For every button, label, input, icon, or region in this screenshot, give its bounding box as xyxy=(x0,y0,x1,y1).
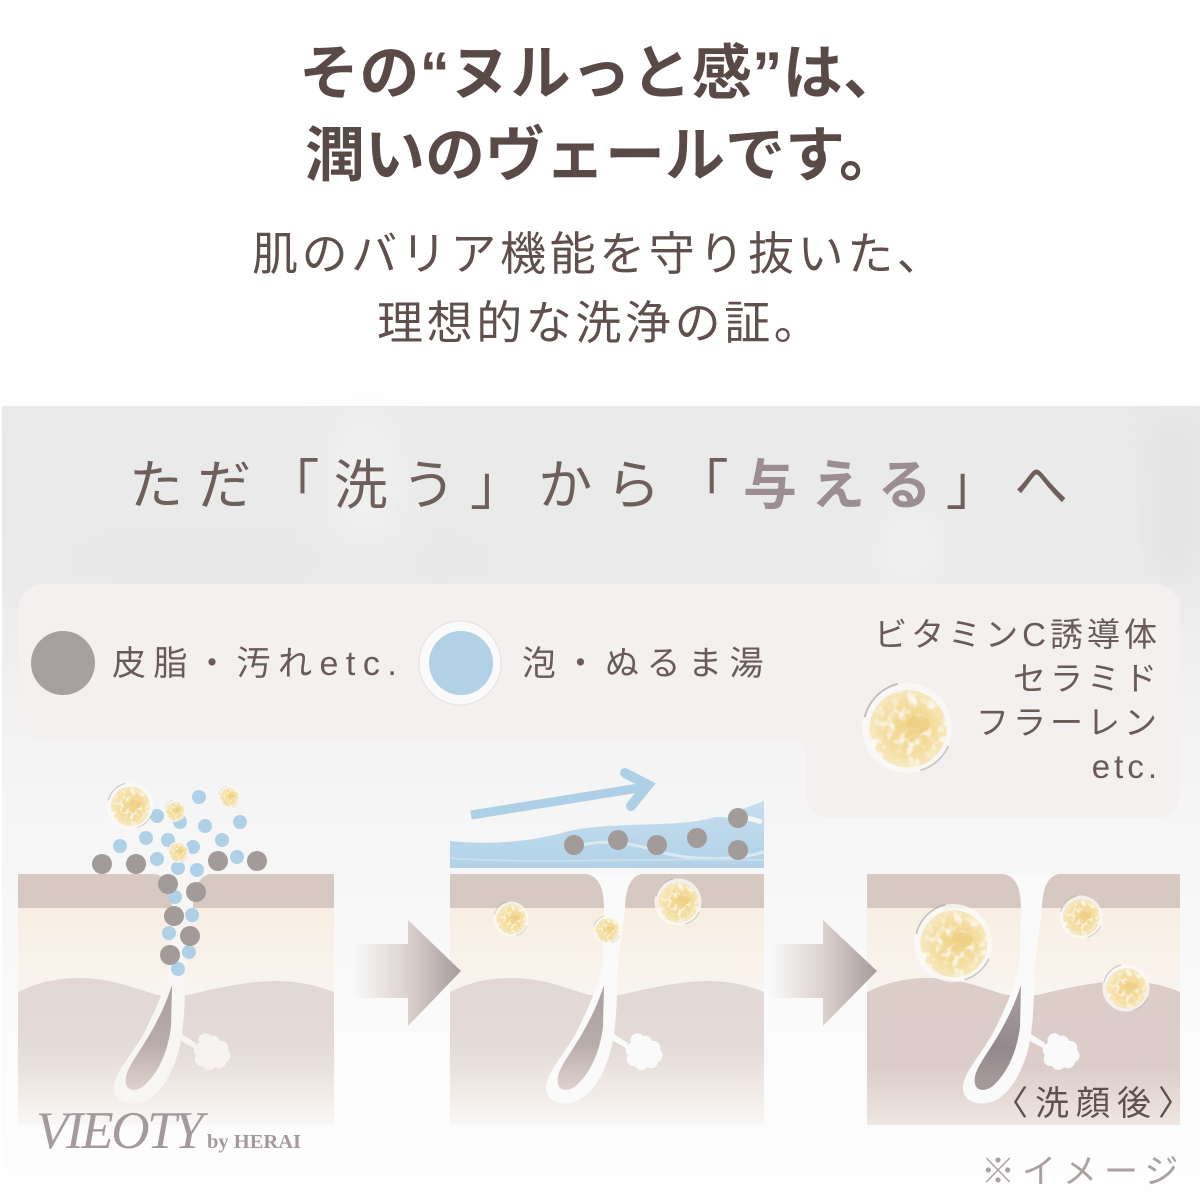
grey sebum particles xyxy=(92,851,267,965)
golden bubbles xyxy=(494,878,702,944)
after-wash label: 〈洗顔後〉 xyxy=(994,1085,1199,1123)
legend: ingredients: セラミド xyxy=(1013,660,1161,697)
arrow: step 1 to step 2 xyxy=(352,920,461,1026)
background panel xyxy=(2,406,1200,1200)
legend: foam and lukewarm water xyxy=(419,621,771,705)
legend: sebum and dirt xyxy=(31,631,404,695)
brand logo: VIEOTY xyxy=(36,1102,209,1160)
skin layers xyxy=(867,874,1180,1125)
image note: ※イメージ xyxy=(981,1153,1185,1191)
panel: skin step 2 xyxy=(450,773,764,1125)
arrow: step 2 to step 3 xyxy=(769,920,877,1026)
arrow: water flow xyxy=(471,773,648,815)
grey sebum particles xyxy=(564,808,748,860)
legend: ingredients: ビタミンC誘導体 xyxy=(874,616,1161,653)
legend: sebum and dirt: 皮脂・汚れetc. xyxy=(112,645,404,683)
golden bubbles xyxy=(914,896,1150,1012)
heading: ただ「洗う」から「与える」へ xyxy=(129,456,1082,516)
title xyxy=(299,40,903,189)
legend: ingredients: フラーレン xyxy=(976,704,1161,741)
legend: foam and lukewarm water: 泡・ぬるま湯 xyxy=(522,645,771,683)
brand logo xyxy=(36,1102,301,1160)
golden bubbles xyxy=(107,783,240,863)
skin layers xyxy=(18,874,334,1125)
panel: skin step 1 xyxy=(18,783,334,1125)
legend: ingredients xyxy=(862,616,1161,785)
panel: skin step 3 xyxy=(867,874,1199,1125)
legend: ingredients: etc. xyxy=(1092,748,1161,785)
brand logo: by HERAI xyxy=(207,1131,301,1153)
subtitle xyxy=(252,228,946,349)
blue foam particles xyxy=(113,790,247,976)
title: その“ヌルっと感”は、 xyxy=(299,40,903,107)
subtitle: 肌のバリア機能を守り抜いた、 xyxy=(252,228,946,280)
title: 潤いのヴェールです。 xyxy=(305,122,899,189)
subtitle: 理想的な洗浄の証。 xyxy=(377,297,823,349)
water layer xyxy=(450,801,764,868)
skin layers xyxy=(450,874,764,1125)
panel: legend xyxy=(18,584,1180,818)
